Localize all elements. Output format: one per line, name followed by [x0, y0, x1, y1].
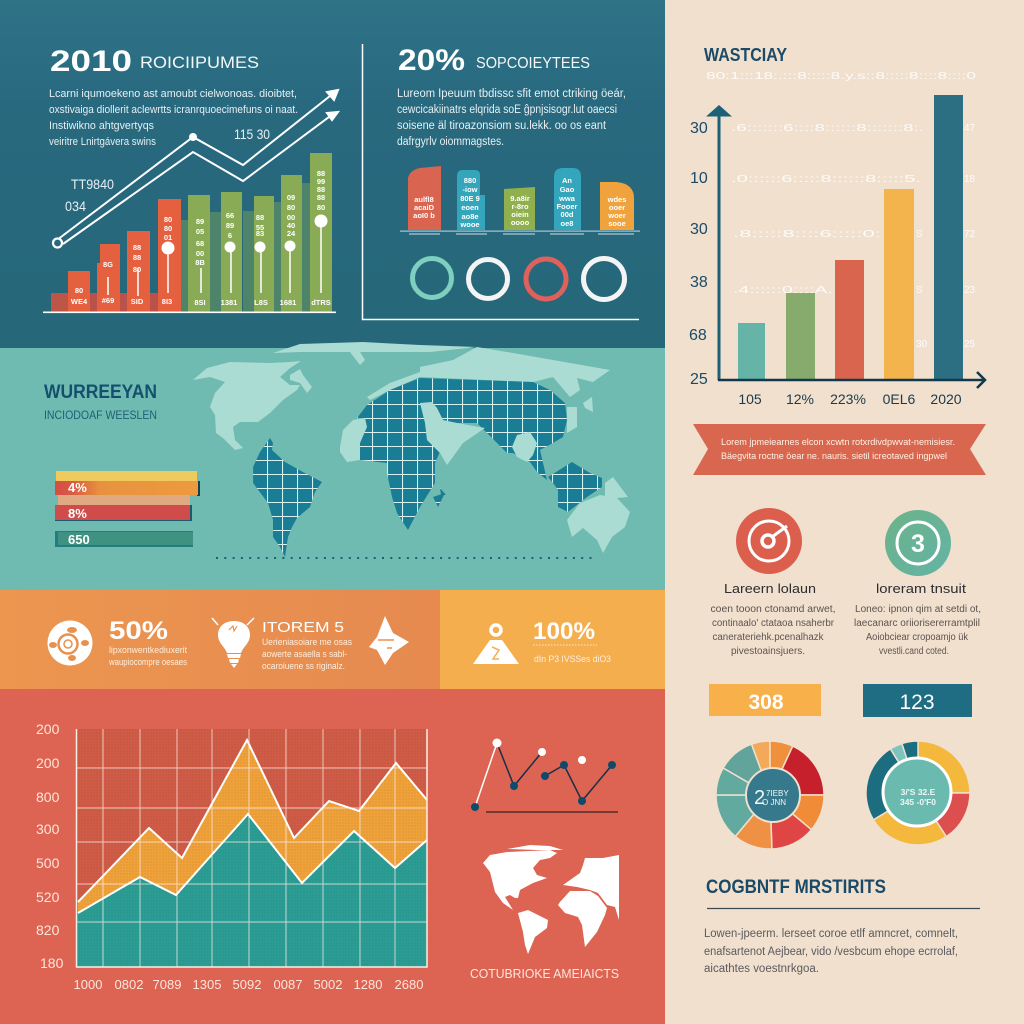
chart x-axis labels: 5002: [314, 977, 342, 992]
chart x-axis labels: 7089: [153, 977, 181, 992]
badge: yellow: [709, 684, 821, 716]
stat: 50%: waupiocompre oesaes: [108, 657, 187, 667]
bar chart: red and green columns: 00: [287, 213, 295, 222]
chart labels: TT9840: [71, 176, 114, 192]
y-axis labels: 30: [690, 221, 708, 238]
chart y-axis labels: 520: [36, 889, 60, 905]
feature: target: pivestoainsjuers.: [731, 646, 805, 657]
feature: number 3: loreram tnsuit: [876, 582, 967, 596]
bar chart: coloured cards: 880: [464, 176, 476, 185]
icon: circular emblem: [48, 620, 92, 666]
arrow: x axis: [718, 372, 985, 388]
bar chart: red and green columns: 24: [287, 229, 296, 238]
faint white data rows: [706, 71, 977, 350]
bar chart: coloured cards: wooe: [459, 220, 480, 229]
ribbon callout: [693, 424, 986, 475]
text block: description: [397, 88, 626, 148]
panel: dark teal header: [0, 0, 665, 348]
bar chart: red and green columns: 83: [256, 229, 264, 238]
panel: teal map band: [0, 348, 665, 590]
bar chart: coloured cards: oiein: [511, 210, 529, 219]
icon: lightbulb: [212, 618, 254, 668]
bar chart: red and green columns: 6: [228, 231, 232, 240]
heading: 20%: [398, 44, 590, 77]
chart x-axis labels: 5092: [233, 977, 261, 992]
heading: right column chart: WASTCIAY: [704, 45, 787, 65]
light land masses: [193, 342, 630, 553]
chart y-axis labels: 200: [36, 721, 60, 737]
stat: 50%: lipxonwentkediuxerit: [109, 645, 187, 655]
ribbon callout: Lorem jpmeiearnes elcon xcwtn rotxrdivdpwvat-nemisiesr.: [721, 437, 955, 448]
heading: 20%: SOPCOIEYTEES: [476, 55, 590, 72]
bar chart: red and green columns: 88: [133, 253, 141, 262]
chart labels: 034: [65, 198, 86, 214]
icon: target: [736, 508, 802, 574]
chart x-axis labels: 0802: [115, 977, 143, 992]
mini line chart: [471, 738, 618, 812]
bar chart: coloured cards: eoen: [461, 203, 479, 212]
bar chart: red and green columns: 88: [133, 243, 141, 252]
bar chart: red and green columns: 88: [317, 169, 325, 178]
text block: closing paragraph: aicathtes voestnrkgoa.: [704, 963, 819, 975]
bar chart: rising columns: [710, 95, 985, 388]
panel: cream right column background: [665, 0, 1024, 1024]
bar chart: red and green columns: 8I3: [162, 297, 172, 306]
chart x-axis labels: 1280: [354, 977, 382, 992]
heading: map band title: WURREEYAN: [44, 382, 157, 403]
chart x-axis labels: 0087: [274, 977, 302, 992]
badge: yellow: 308: [748, 691, 784, 714]
text block: intro: veiritre Lnirtgávera swins: [49, 136, 156, 148]
x-axis labels: 2020: [930, 391, 962, 407]
bar chart: red and green columns: #69: [102, 296, 114, 305]
bar chart: coloured cards: 9.a8ir: [510, 194, 530, 203]
heading: 2010: [50, 45, 259, 78]
donut chart left: 2: [754, 787, 765, 809]
chart x-axis labels: [74, 977, 423, 992]
text block: closing paragraph: [704, 928, 958, 975]
bar chart: red and green columns: 80: [164, 224, 172, 233]
progress rings: [412, 258, 624, 300]
bar chart: red and green columns: 80: [133, 265, 141, 274]
donut chart right: 345 -0'F0: [900, 797, 936, 807]
stat: lightbulb: [212, 616, 409, 671]
bar chart: red and green columns: dTRS: [311, 298, 331, 307]
bar chart: coloured cards: 00d: [561, 210, 574, 219]
stat: lightbulb: aowerte asaella s sabl-: [262, 649, 347, 659]
donut chart right: 3/'S 32.E: [901, 787, 936, 797]
faint white data rows: S: [916, 229, 923, 240]
bar chart: red and green columns: 80: [164, 215, 172, 224]
badge: teal: [863, 684, 972, 717]
bar chart: red and green columns: 8B: [195, 258, 205, 267]
stacked horizontal bars: 8%: [68, 506, 87, 521]
bar chart: coloured cards: woer: [607, 211, 626, 220]
y-axis labels: 30: [690, 120, 708, 137]
y-axis labels: [689, 120, 708, 388]
arrow: y axis: [710, 107, 728, 380]
text block: description: dafrgyrlv oiommagstes.: [397, 136, 504, 148]
stat: 100%: [473, 618, 611, 664]
bar chart: red and green columns: 89: [196, 217, 204, 226]
arrow: double rising trend line: [53, 90, 338, 248]
bar chart: red and green columns: 55: [256, 223, 264, 232]
x-axis labels: 0EL6: [883, 391, 916, 407]
bar chart: coloured cards: acaiD: [414, 203, 435, 212]
x-axis labels: 105: [738, 391, 762, 407]
chart x-axis labels: 1000: [74, 977, 102, 992]
icon: number 3: 3: [911, 530, 925, 558]
heading: 2010: ROICIIPUMES: [140, 53, 259, 72]
stat: 50%: [48, 617, 187, 667]
bar chart: red and green columns: 1681: [280, 298, 296, 307]
feature: number 3: laecanarc oriiorisererramtplil: [854, 618, 980, 629]
bar chart: coloured cards: ao8e: [461, 212, 479, 221]
bar chart: red and green columns: 40: [287, 221, 295, 230]
x-axis labels: 12%: [786, 391, 814, 407]
heading: 20%: 20%: [398, 44, 465, 77]
stacked horizontal bars: 650: [68, 532, 90, 547]
ribbon callout: Bäegvita roctne öear ne. nauris. sietil icreotaved ingpwel: [721, 451, 947, 462]
chart labels: [65, 126, 270, 214]
donut chart left: [716, 741, 824, 849]
area chart: [76, 729, 427, 967]
faint white data rows: .8:::::8::::6:::::0:: [733, 229, 881, 240]
heading: bottom right section: COGBNTF MRSTIRITS: [706, 877, 886, 898]
bar chart: red and green columns: 01: [164, 233, 172, 242]
faint white data rows: 47: [964, 123, 976, 134]
panel: yellow stat band: [440, 590, 665, 689]
stat: lightbulb: ocaroiuene ss riginalz.: [262, 661, 345, 671]
bar chart: red and green columns: 8SI: [194, 298, 206, 307]
faint white data rows: 23: [964, 285, 976, 296]
bar chart: coloured cards: Gao: [560, 185, 575, 194]
frame line: [362, 44, 639, 320]
donut chart right: [866, 741, 970, 845]
faint white data rows: 18: [964, 174, 976, 185]
text block: description: soisene äl tiroazonsiom su.lekk. oo os eant: [397, 120, 607, 132]
icon: number 3: [885, 510, 951, 576]
bar chart: coloured cards: Fooer: [557, 202, 577, 211]
bar chart: coloured cards: aulfl8: [414, 195, 434, 204]
light land over grid: [340, 402, 537, 465]
bar chart: coloured cards: An: [562, 176, 572, 185]
bar chart: red and green columns: 89: [226, 221, 234, 230]
chart y-axis labels: 500: [36, 855, 60, 871]
bar chart: coloured cards: [400, 166, 640, 234]
bar chart: red and green columns: 88: [317, 185, 325, 194]
bar chart: red and green columns: 68: [196, 239, 204, 248]
feature: number 3: [854, 510, 981, 657]
bar chart: red and green columns: L8S: [254, 298, 268, 307]
donut chart left: O JNN: [762, 798, 786, 807]
bar chart: coloured cards: oe8: [561, 219, 573, 228]
chart y-axis labels: 300: [36, 821, 60, 837]
text block: intro: [49, 88, 298, 148]
text block: intro: Instiwikno ahtgvertyqs: [49, 120, 154, 132]
panel: left growth chart block: [43, 45, 338, 313]
bar chart: red and green columns: 09: [287, 193, 295, 202]
stat: lightbulb: Uerieniasoiare me osas: [262, 637, 352, 647]
faint white data rows: .6:::::::6::::8::::::8:::::::8:.: [731, 123, 924, 134]
stat: 50%: 50%: [109, 617, 168, 645]
chart y-axis labels: 200: [36, 755, 60, 771]
panel: orange stat band: [0, 590, 440, 689]
divider rule: [707, 908, 980, 910]
y-axis labels: 10: [690, 170, 708, 187]
heading: map band title: [44, 382, 157, 422]
feature: target: coen tooon ctonamd arwet,: [710, 604, 836, 615]
bar chart: red and green columns: SID: [131, 297, 144, 306]
faint white data rows: 30: [916, 339, 928, 350]
bar chart: coloured cards: oooo: [511, 218, 530, 227]
faint white data rows: .4::::::0::::A.: [733, 285, 833, 296]
dotted scale line: [216, 557, 594, 559]
bar chart: red and green columns: 1381: [221, 298, 237, 307]
heading: 2010: 2010: [50, 45, 132, 78]
faint white data rows: 25: [964, 339, 976, 350]
feature: number 3: Aoiobciear cropoamjo ük: [866, 632, 969, 643]
faint white data rows: .0::::::6:::::8::::::8:::::5.: [731, 174, 921, 185]
bar chart: coloured cards: 80E 9: [460, 194, 480, 203]
small white world map: [483, 845, 619, 954]
feature: number 3: vvestli.cand coted.: [879, 646, 949, 657]
world map with grid: [193, 342, 630, 557]
x-axis labels: 223%: [830, 391, 866, 407]
icon: diamond arrows: [369, 616, 409, 665]
text block: intro: Lcarni iqumoekeno ast amoubt cielwonoas. dioibtet,: [49, 88, 297, 100]
feature: target: canerateriehk.pcenalhazk: [712, 632, 824, 643]
stat: 100%: dIn P3 IVSSes diO3: [534, 654, 611, 664]
x-axis labels: [738, 391, 962, 407]
gridded land masses: [253, 378, 602, 557]
panel: 20% statistics block: [362, 44, 640, 320]
chart y-axis labels: 180: [40, 955, 64, 971]
y-axis labels: 68: [689, 327, 707, 344]
bar chart: red and green columns: 88: [317, 193, 325, 202]
map caption: COTUBRIOKE AMEIAICTS: [470, 967, 619, 981]
chart labels: 115 30: [234, 126, 270, 142]
heading: map band title: INCIODOAF WEESLEN: [44, 408, 157, 422]
faint white data rows: S: [916, 285, 923, 296]
bar chart: red and green columns: [43, 153, 336, 313]
icon: person triangle: [473, 625, 519, 664]
chart y-axis labels: [36, 721, 64, 971]
bar chart: red and green columns: WE4: [71, 297, 88, 306]
bar chart: red and green columns: 99: [317, 177, 325, 186]
bar chart: red and green columns: 8G: [103, 260, 113, 269]
bar chart: red and green columns: 80: [287, 203, 295, 212]
stat: lightbulb: ITOREM 5: [262, 619, 344, 636]
feature: target: continaalo' ctataoa nsaherbr: [712, 618, 835, 629]
panel: red band: [0, 689, 665, 1024]
bar chart: red and green columns: 88: [256, 213, 264, 222]
feature: target: [710, 508, 836, 657]
bar chart: coloured cards: ooer: [609, 203, 625, 212]
bar chart: red and green columns: 80: [75, 286, 83, 295]
bar chart: coloured cards: -iow: [462, 185, 478, 194]
faint white data rows: 80:1:::18:.:::8:::::8.y.s::8:::::8::::8::::0: [706, 71, 977, 82]
badge: teal: 123: [899, 691, 935, 714]
chart x-axis labels: 2680: [395, 977, 423, 992]
text block: closing paragraph: Lowen-jpeerm. lerseet coroe etlf amncret, comnelt,: [704, 928, 958, 940]
chart y-axis labels: 820: [36, 922, 60, 938]
bar chart: red and green columns: 00: [196, 249, 204, 258]
bar chart: coloured cards: sooe: [608, 219, 626, 228]
text block: intro: oxstivaiga diollerit aclewrtts icranrquoecimefuns oi naat.: [49, 104, 298, 116]
chart y-axis labels: 800: [36, 789, 60, 805]
bar chart: coloured cards: wdes: [607, 195, 626, 204]
bar chart: red and green columns: 05: [196, 227, 204, 236]
faint white data rows: 72: [964, 229, 976, 240]
bar chart: coloured cards: aoI0 b: [413, 211, 435, 220]
y-axis labels: 25: [690, 371, 708, 388]
stacked horizontal bars: [55, 471, 200, 547]
chart x-axis labels: 1305: [193, 977, 221, 992]
y-axis labels: 38: [690, 274, 708, 291]
bar chart: red and green columns: 66: [226, 211, 234, 220]
feature: target: Lareern lolaun: [724, 582, 816, 596]
bar chart: red and green columns: 80: [317, 203, 325, 212]
donut chart left: 7IEBY: [766, 789, 789, 798]
stacked horizontal bars: 4%: [68, 480, 87, 495]
bar chart: coloured cards: wwa: [558, 194, 576, 203]
text block: description: Lureom Ipeuum tbdissc sfit emot ctriking öeár,: [397, 88, 626, 100]
text block: closing paragraph: enafsartenot Aejbear, vido /vesbcum ehope ecrrolaf,: [704, 946, 958, 958]
feature: number 3: Loneo: ipnon qim at setdi ot,: [855, 604, 981, 615]
stat: 100%: 100%: [533, 618, 595, 645]
bar chart: coloured cards: r-8ro: [511, 202, 529, 211]
text block: description: cewcicakiinatrs elqrida soE ĝpnjsisogr.lut oaecsi: [397, 104, 617, 116]
